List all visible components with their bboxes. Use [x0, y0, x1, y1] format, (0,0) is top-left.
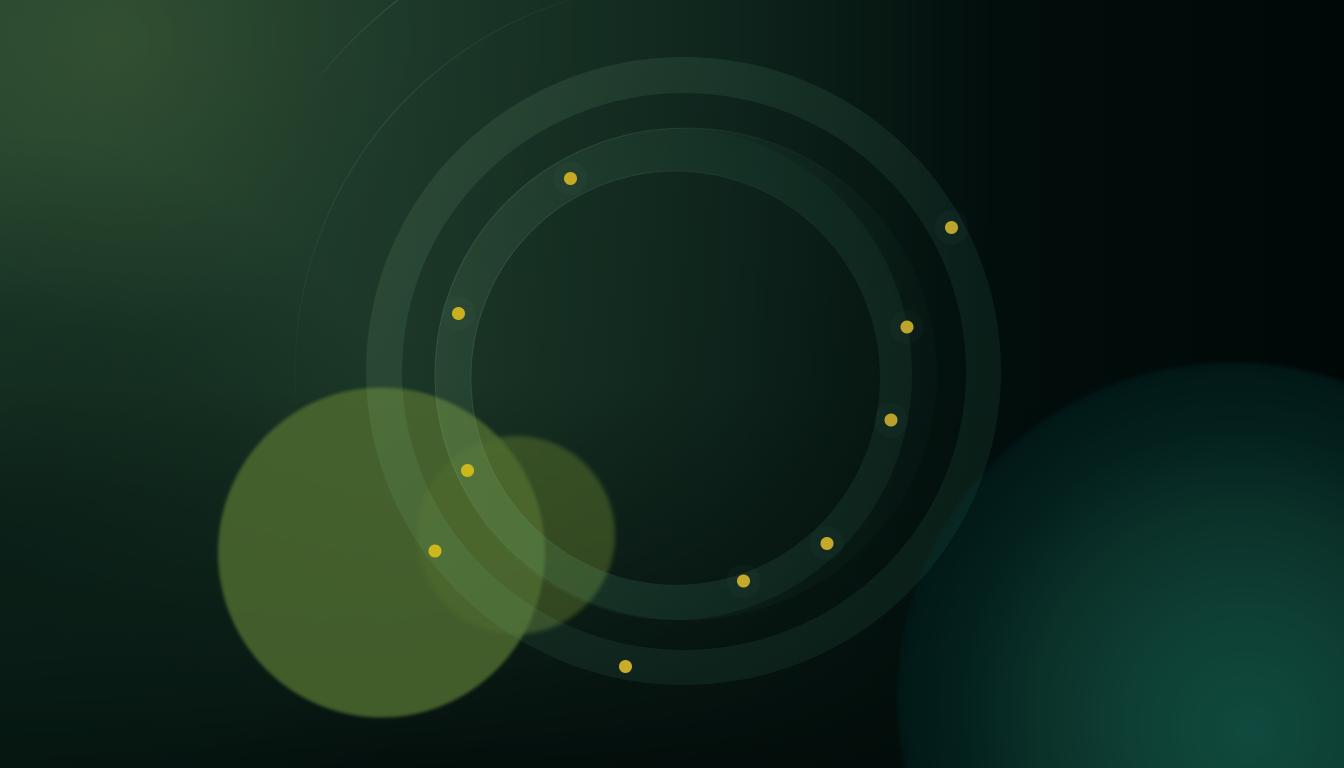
teal sphere	[890, 355, 1344, 768]
yellow dots	[428, 172, 958, 673]
inner ring main band	[435, 128, 912, 620]
faint outer arcs	[295, 0, 569, 470]
large olive circle	[218, 388, 545, 718]
small olive circle	[417, 436, 615, 634]
inner ring faint outer band	[435, 128, 937, 620]
dot halos	[442, 162, 968, 598]
inner ring outline arcs	[435, 128, 937, 620]
outer ring band	[366, 57, 1001, 685]
